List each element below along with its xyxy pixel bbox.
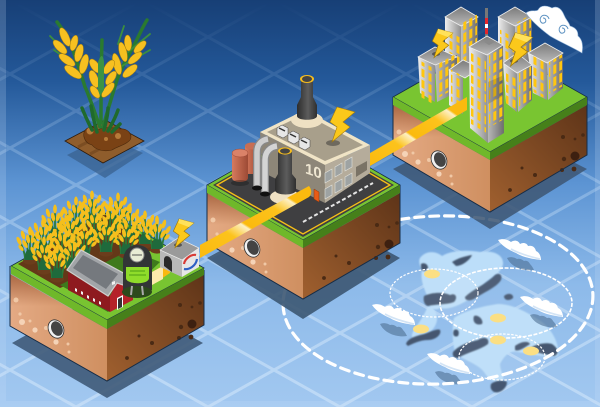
field soil [18, 214, 162, 288]
curved pipes [252, 139, 277, 196]
building back right [498, 7, 532, 76]
roof [260, 110, 370, 165]
block 2: power plant [207, 130, 400, 299]
continents [412, 251, 558, 382]
stems and leaves [50, 20, 150, 132]
world map with network rings [372, 239, 572, 392]
soil block [10, 266, 204, 381]
pipe hole [241, 236, 263, 260]
barn door [117, 295, 123, 310]
shadow under block 1 [12, 290, 203, 398]
vent grille [356, 161, 367, 177]
label 10: 10 [305, 160, 322, 183]
hub markers [413, 270, 539, 356]
second chimney [270, 147, 300, 204]
building right [528, 43, 563, 100]
cloud shadows [380, 257, 557, 384]
grass [207, 130, 400, 248]
network ring: north america [390, 269, 478, 317]
big dashed transmission ring [280, 211, 596, 389]
barn shadow [60, 250, 160, 312]
big wheat plant illustration [50, 20, 150, 178]
beam: factory to city [370, 97, 467, 166]
soil tile [65, 120, 144, 163]
grass [11, 212, 204, 329]
network ring: eurasia [440, 268, 572, 338]
door [314, 189, 319, 202]
building back left [445, 7, 478, 82]
building middle [449, 60, 480, 114]
road dashes [303, 183, 373, 222]
city buildings [418, 7, 563, 143]
windows [325, 157, 352, 199]
recycle arrows [184, 255, 196, 264]
wheat field [15, 190, 172, 283]
pipe hole [45, 317, 67, 341]
central tower [469, 36, 504, 143]
beam stub: generator to meter [152, 262, 170, 285]
roof vents [277, 125, 310, 150]
soil block [207, 185, 400, 299]
network ring: africa asia [459, 334, 545, 380]
lightning bolt on box [173, 219, 194, 248]
barn roof [67, 250, 133, 296]
building left [418, 47, 457, 105]
walls [260, 132, 325, 203]
wheat ears [51, 26, 148, 100]
bio-digester meter [122, 245, 152, 298]
block 1: farm [10, 212, 204, 381]
bolt left [432, 29, 453, 58]
pipe hole [428, 148, 450, 172]
beam: farm to factory [200, 186, 311, 258]
soil block [393, 97, 587, 212]
antenna [485, 8, 488, 38]
barn side wall [68, 272, 110, 312]
grass [393, 42, 587, 160]
dark coastal areas [406, 255, 558, 392]
soil mound [84, 127, 131, 151]
asphalt yard [213, 133, 394, 237]
barn [67, 250, 133, 312]
rooftop cloud [526, 6, 583, 53]
shadow under block 3 [393, 120, 587, 229]
generator box [160, 238, 199, 277]
plant shadow [67, 136, 143, 178]
bolt right [509, 33, 532, 66]
yellow road line [217, 135, 390, 234]
barn windows [75, 288, 101, 305]
lightning bolt on factory [326, 107, 355, 146]
shadow under block 2 [207, 205, 400, 319]
barn gable wall [110, 276, 133, 312]
clouds [372, 239, 563, 374]
block 3: city [393, 42, 587, 212]
storage tanks [231, 142, 259, 186]
factory building [260, 110, 370, 203]
building right centre [503, 53, 532, 112]
main chimney [291, 75, 323, 128]
